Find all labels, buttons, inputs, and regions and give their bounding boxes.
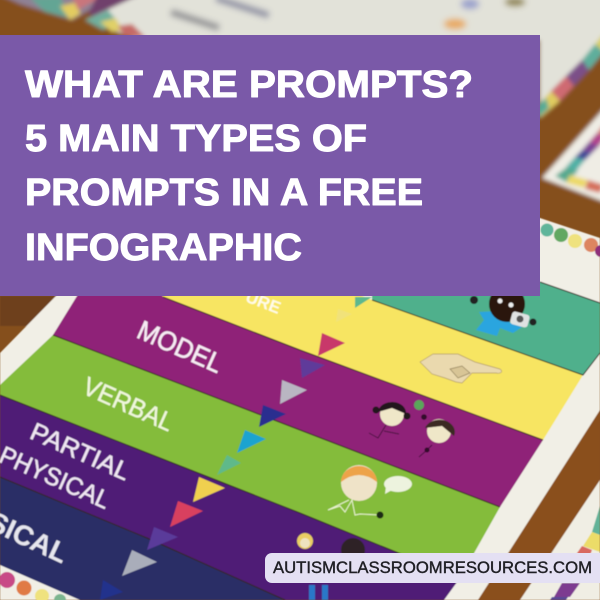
second paper at bottom right [520, 480, 600, 600]
stripe label: verbal: VERBAL [78, 371, 178, 437]
title text [25, 64, 473, 269]
colored dots along top of worksheet [540, 224, 600, 257]
arrow trail of colored triangles [100, 297, 372, 600]
stripe: teal picture prompt [372, 220, 600, 375]
stripe label: model: MODEL [133, 315, 227, 379]
top paper [85, 0, 600, 103]
stripe label: partial: PARTIAL [26, 418, 134, 486]
icon: child with speech bubble [328, 465, 412, 518]
colored dots along bottom of worksheet [0, 572, 66, 600]
stripe: magenta model prompt [53, 275, 543, 507]
top-left paper corner with colored edge [0, 0, 155, 20]
stripe dividers [0, 282, 600, 600]
top paper smudges of blurred text [170, 0, 525, 31]
title text: 5 MAIN TYPES OF [25, 118, 367, 160]
icon: two talking children [369, 400, 455, 457]
title text: WHAT ARE PROMPTS? [25, 64, 473, 106]
icon: pointing hand [420, 354, 502, 383]
top paper bottom strip [85, 10, 146, 38]
stripe: purple partial physical prompt [0, 395, 460, 600]
photo: worksheet with prompt levels [0, 200, 600, 600]
second paper at right [542, 102, 600, 204]
title panel [0, 35, 540, 296]
stripe: yellow gesture prompt [150, 270, 583, 440]
icon: child with camera [470, 286, 536, 336]
icon: children on partial physical stripe [297, 533, 365, 600]
stripe: navy full physical prompt [0, 477, 285, 600]
title text: PROMPTS IN A FREE [25, 172, 423, 214]
second paper colored squares [555, 125, 600, 193]
website text: AUTISMCLASSROOMRESOURCES.COM [273, 559, 592, 577]
top paper right strip [538, 26, 600, 118]
table detail: wood grain [0, 296, 600, 600]
stripe label: picture: URE [243, 287, 283, 318]
title text: INFOGRAPHIC [25, 227, 302, 269]
website badge [265, 553, 600, 583]
stripe: green verbal prompt [0, 335, 500, 578]
worksheet paper [0, 200, 600, 600]
